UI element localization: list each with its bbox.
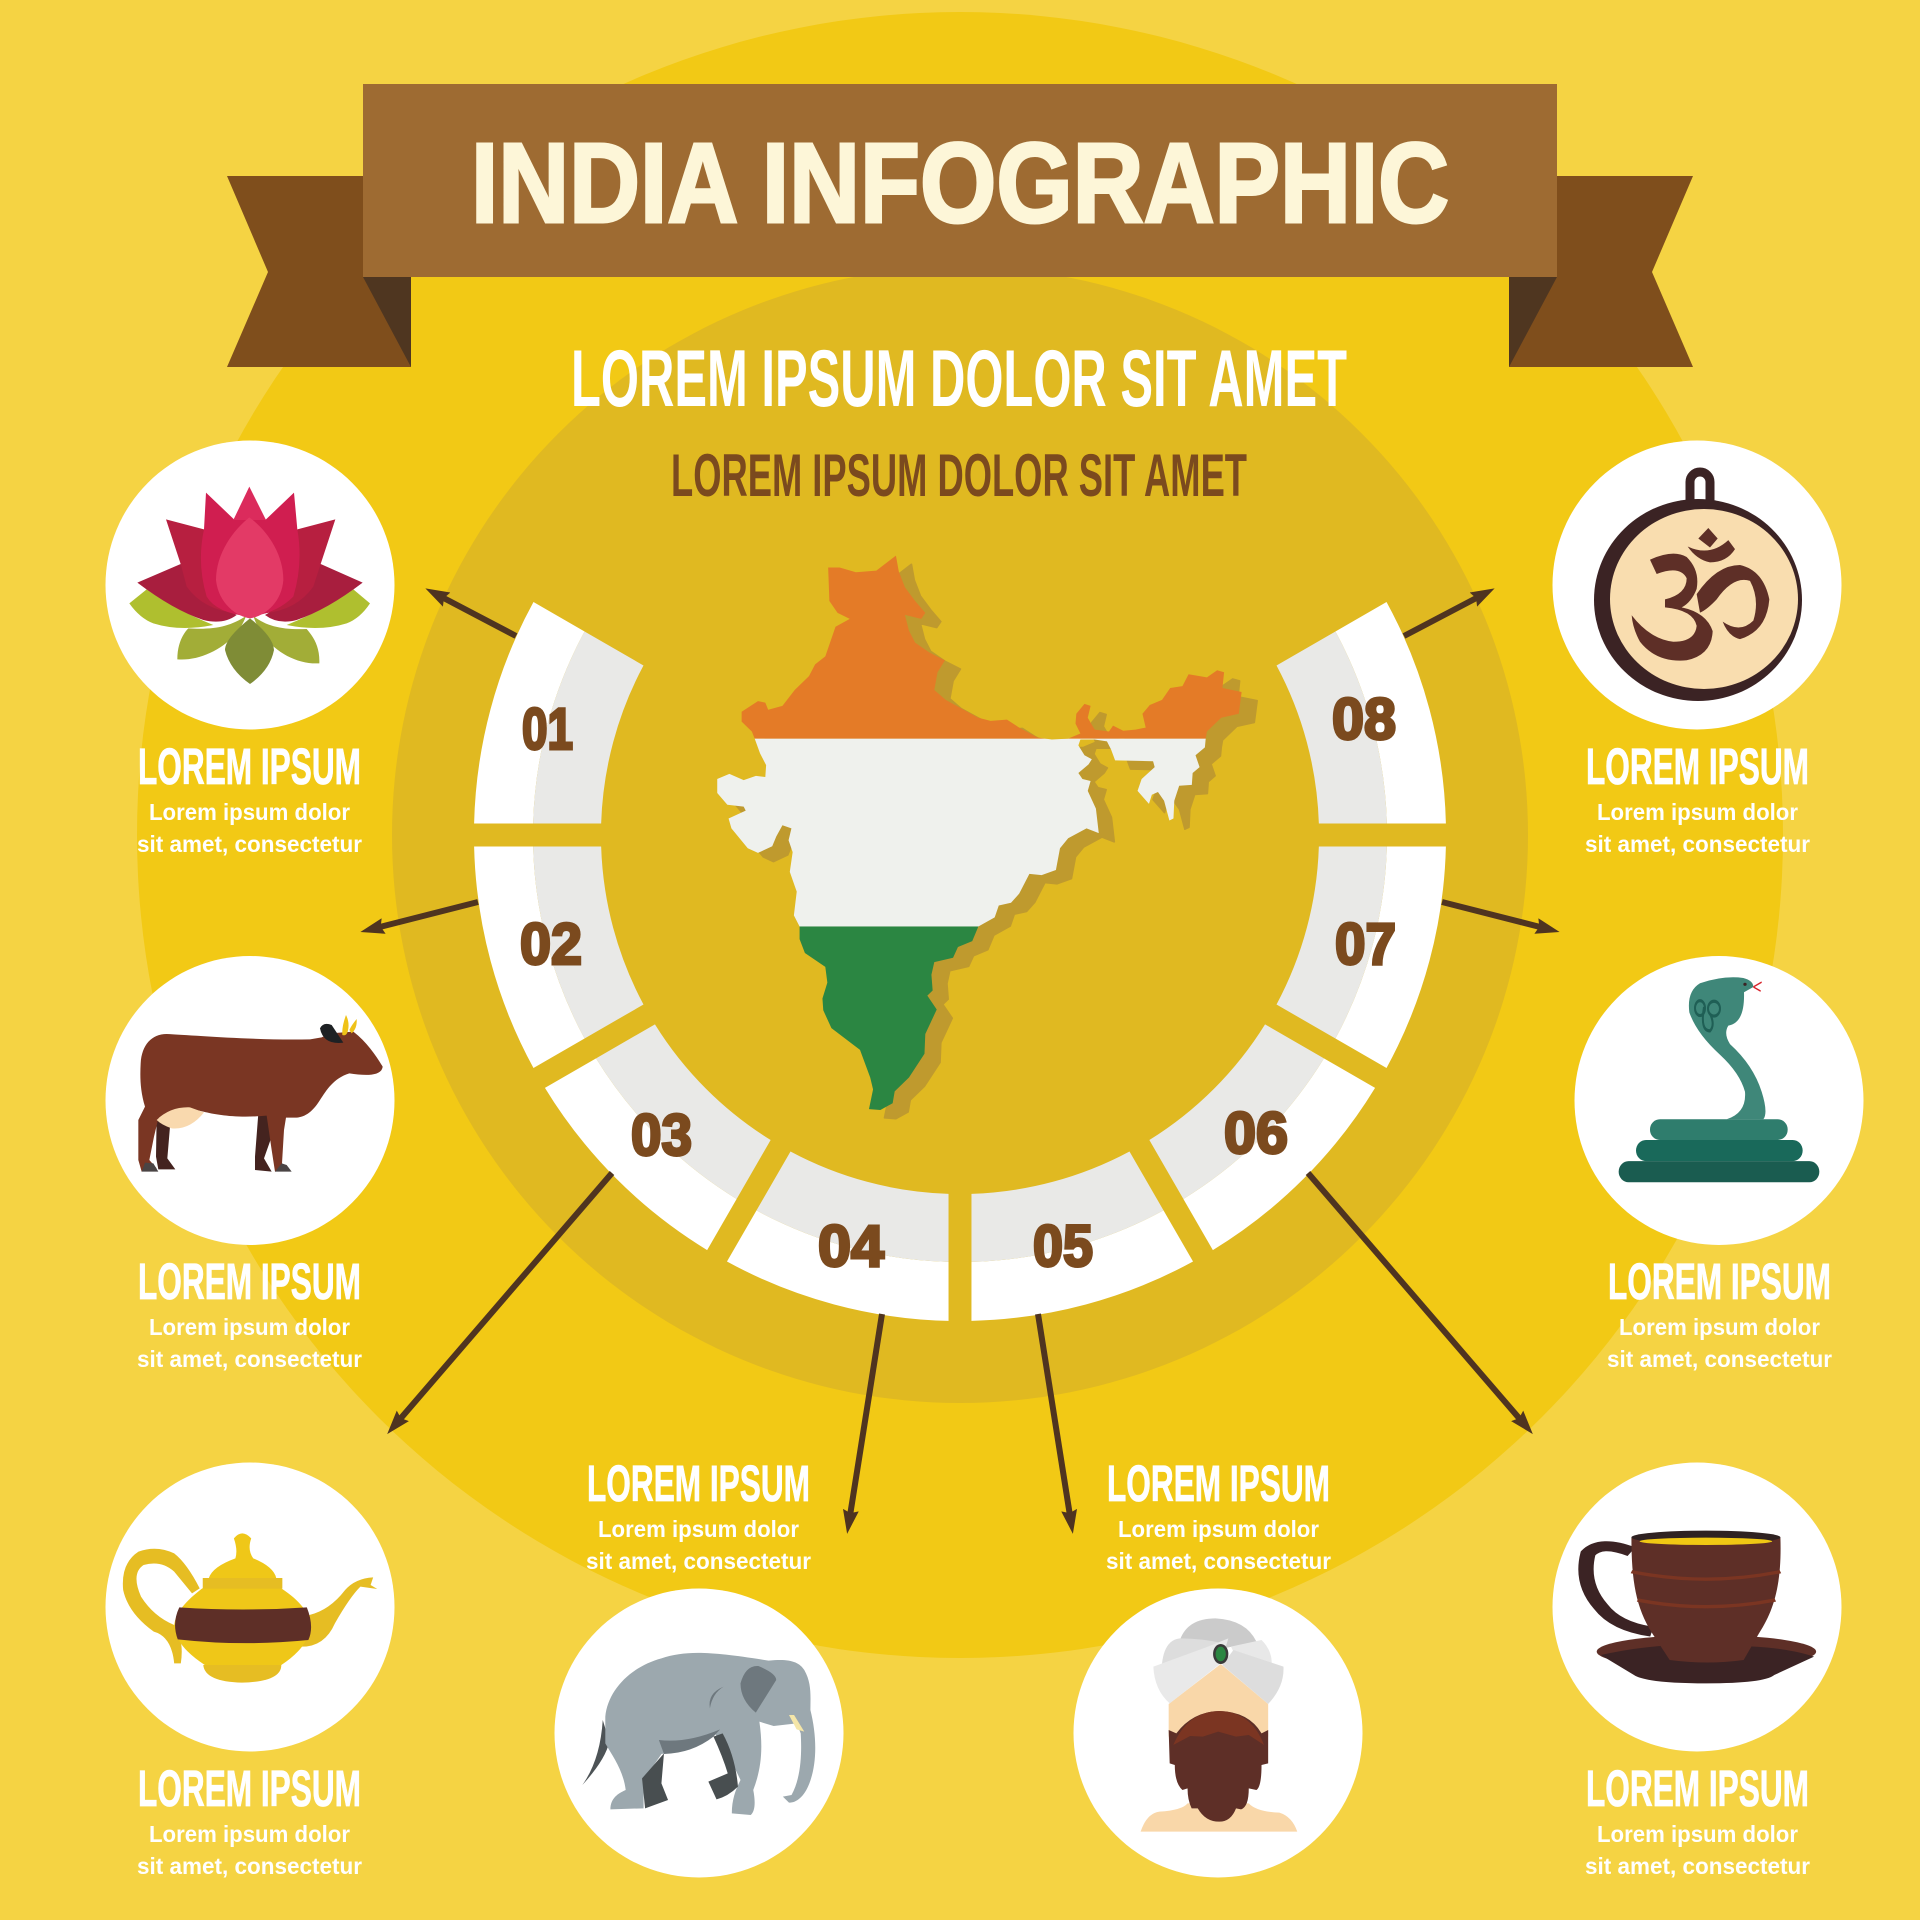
label: elephant heading: LOREM IPSUM [587,1455,810,1512]
label: om description: Lorem ipsum dolor [1597,799,1798,825]
panel: om pendant [1552,440,1842,857]
ring segment 07 [1268,815,1459,1072]
subtitle white: LOREM IPSUM DOLOR SIT AMET [571,334,1347,424]
label: elephant description: sit amet, consectetur [586,1548,811,1574]
arrow 08 [1404,594,1484,636]
label: cobra description: Lorem ipsum dolor [1619,1314,1820,1340]
label: turban heading: LOREM IPSUM [1107,1455,1330,1512]
panel: cobra [1574,956,1864,1372]
inner mustard circle [392,267,1528,1403]
label: cobra description [1607,1314,1832,1372]
arrow 01 [436,594,516,636]
icon: cow [138,1015,383,1172]
icon: cobra [1619,977,1819,1182]
arrow 06 [1308,1173,1525,1425]
panel: turban man [1074,1455,1362,1878]
label: lotus description: Lorem ipsum dolor [149,799,350,825]
number 08: 08 [1332,687,1396,752]
number 07: 07 [1335,912,1396,977]
subtitle brown: LOREM IPSUM DOLOR SIT AMET [671,442,1247,509]
icon: om pendant [1594,472,1802,701]
label: turban description [1106,1516,1331,1574]
label: teapot description: Lorem ipsum dolor [149,1821,350,1847]
arrow 03 [395,1173,612,1425]
label: lotus heading: LOREM IPSUM [138,738,361,795]
label: elephant description: Lorem ipsum dolor [598,1516,799,1542]
ring segment 06 [1126,1001,1385,1260]
icon: elephant [582,1653,815,1815]
label: teapot description [137,1821,362,1879]
number 06: 06 [1224,1101,1288,1166]
arrow 07 [1442,902,1548,929]
panel: teapot [106,1462,394,1879]
label: cobra description: sit amet, consectetur [1607,1346,1832,1372]
ring segment 05 [940,1143,1197,1334]
panel: lotus [106,440,394,857]
ring segment 04 [723,1143,980,1334]
ring segment 01 [461,598,652,855]
arrow 04 [849,1314,882,1522]
label: lotus description: sit amet, consectetur [137,831,362,857]
arrow 02 [372,902,478,929]
number 04: 04 [818,1214,884,1279]
icon: turbaned man [1141,1618,1297,1832]
panel: cow [106,956,394,1372]
icon: teapot [123,1533,377,1683]
label: turban description: Lorem ipsum dolor [1118,1516,1319,1542]
ring segment 08 [1268,598,1459,855]
label: cow description [137,1314,362,1372]
number 05: 05 [1033,1214,1093,1279]
panel: elephant [554,1455,844,1878]
icon: tea cup [1586,1531,1816,1683]
panel: tea cup [1552,1462,1842,1879]
label: cow description: sit amet, consectetur [137,1346,362,1372]
large yellow circle [137,12,1783,1658]
title ribbon banner [227,84,1693,367]
label: cow heading: LOREM IPSUM [138,1253,361,1310]
ring segment 02 [461,815,652,1072]
number 02: 02 [520,912,582,977]
map of India in flag colours [701,544,1272,1124]
icon: lotus [129,487,370,684]
arrow 05 [1038,1314,1071,1522]
label: tea cup description: sit amet, consectetur [1585,1853,1810,1879]
ring segment 03 [535,1001,794,1260]
label: om description [1585,799,1810,857]
label: om description: sit amet, consectetur [1585,831,1810,857]
label: lotus description [137,799,362,857]
label: cow description: Lorem ipsum dolor [149,1314,350,1340]
label: teapot description: sit amet, consectetur [137,1853,362,1879]
number 03: 03 [631,1103,692,1168]
label: tea cup description [1585,1821,1810,1879]
title: INDIA INFOGRAPHIC [471,120,1449,246]
label: teapot heading: LOREM IPSUM [138,1760,361,1817]
label: tea cup description: Lorem ipsum dolor [1597,1821,1798,1847]
label: elephant description [586,1516,811,1574]
number 01: 01 [522,697,573,762]
label: turban description: sit amet, consectetur [1106,1548,1331,1574]
